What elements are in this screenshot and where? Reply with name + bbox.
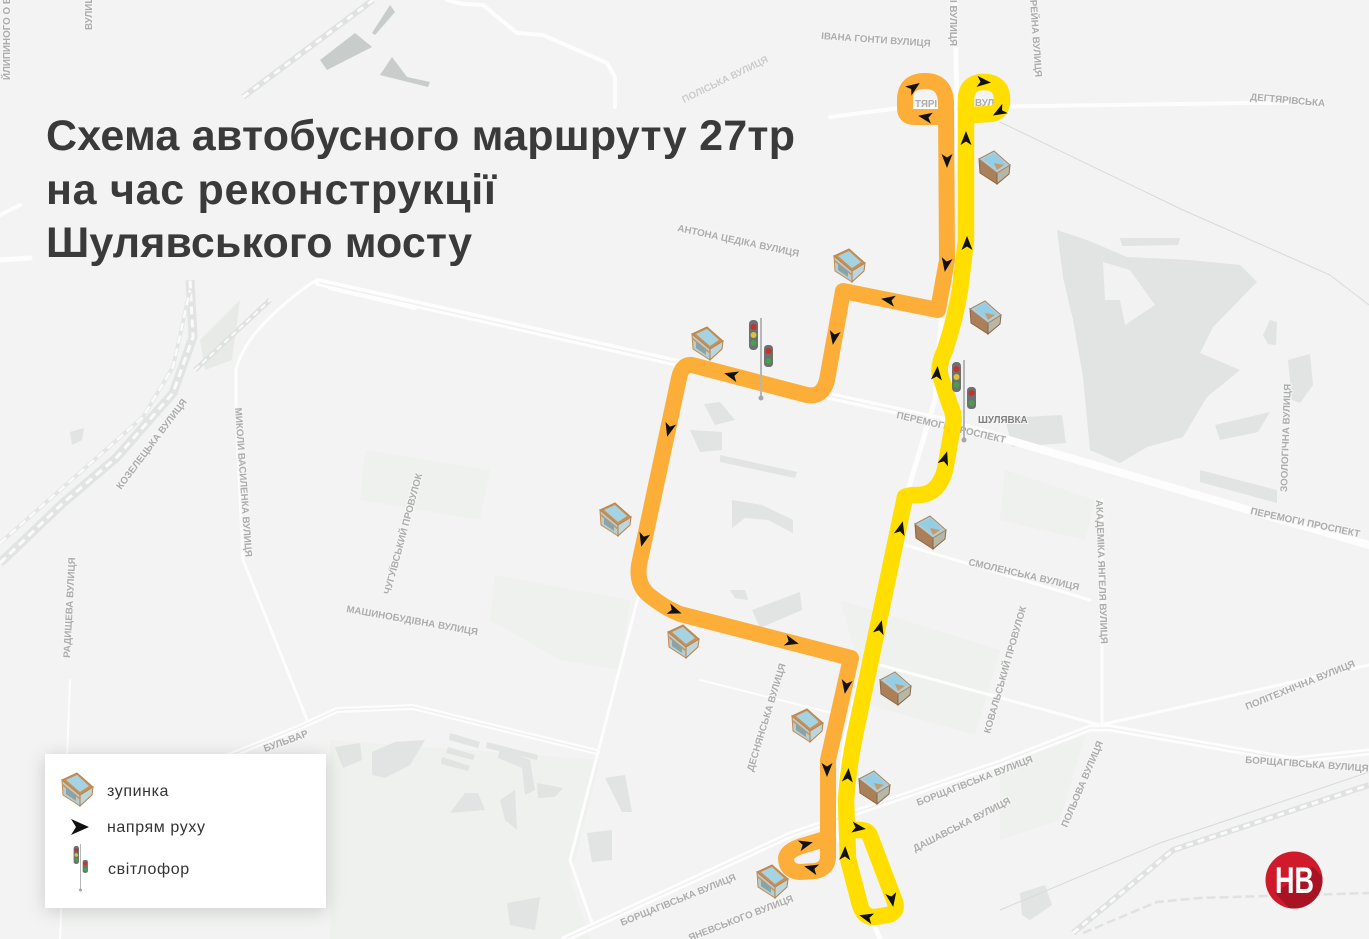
traffic light: east bbox=[952, 360, 976, 442]
title: Схема автобусного маршруту 27тр bbox=[46, 112, 795, 160]
street labels: І ВУЛИЦЯ bbox=[947, 0, 958, 46]
title: Шулявського мосту bbox=[46, 219, 472, 267]
logo: NV: НВ bbox=[1275, 860, 1314, 901]
street labels: ДАШАВСЬКА ВУЛИЦЯ bbox=[911, 796, 1013, 855]
legend text: stop: зупинка bbox=[107, 783, 169, 800]
street labels: ВУЛИ bbox=[975, 98, 1001, 109]
street labels: ДЕСНЯНСЬКА ВУЛИЦЯ bbox=[745, 662, 789, 773]
street labels: АНТОНА ЦЕДІКА ВУЛИЦЯ bbox=[676, 223, 800, 260]
direction arrows: orange route bbox=[636, 78, 953, 875]
traffic light: west bbox=[749, 318, 773, 400]
street labels: КОВАЛЬСЬКИЙ ПРОВУЛОК bbox=[981, 605, 1029, 735]
street labels: ЧУГУЇВСЬКИЙ ПРОВУЛОК bbox=[381, 472, 425, 596]
legend icon: direction arrow bbox=[71, 819, 89, 835]
route: yellow line bbox=[846, 82, 1002, 917]
street labels: РАДИЩЕВА ВУЛИЦЯ bbox=[62, 557, 78, 658]
street labels: ПОЛІСЬКА ВУЛИЦЯ bbox=[680, 54, 770, 106]
legend text: direction: напрям руху bbox=[107, 819, 206, 836]
street labels: ЗООЛОГІЧНА ВУЛИЦЯ bbox=[1279, 384, 1294, 492]
street labels: МИКОЛИ ВАСИЛЕНКА ВУЛИЦЯ bbox=[232, 407, 253, 557]
street labels: БУЛЬВАР bbox=[262, 728, 310, 755]
street labels: ПЕРЕМОГИ ПРОСПЕКТ bbox=[895, 410, 1007, 446]
title: на час реконструкції bbox=[46, 166, 497, 214]
legend icon: traffic light bbox=[74, 844, 88, 892]
legend icon: bus stop bbox=[62, 773, 93, 806]
legend text: traffic light: світлофор bbox=[108, 861, 190, 878]
direction arrows: yellow route bbox=[839, 76, 1008, 924]
street labels: КОЗЕЛЕЦЬКА ВУЛИЦЯ bbox=[115, 397, 190, 492]
street labels: ПОЛІТЕХНІЧНА ВУЛИЦЯ bbox=[1244, 659, 1357, 713]
street labels: БОРЩАГІВСЬКА ВУЛИЦЯ bbox=[915, 754, 1035, 809]
street labels: ТЯРІ bbox=[915, 99, 937, 110]
title bbox=[46, 112, 795, 267]
street labels: АКАДЕМІКА ЯНГЕЛЯ ВУЛИЦЯ bbox=[1093, 500, 1109, 644]
logo: NV bbox=[1266, 852, 1322, 908]
street labels: БОРЩАГІВСЬКА ВУЛИЦЯ bbox=[1245, 755, 1369, 775]
street labels: СМОЛЕНСЬКА ВУЛИЦЯ bbox=[967, 557, 1080, 593]
street labels: МАШИНОБУДІВНА ВУЛИЦЯ bbox=[345, 604, 479, 638]
legend panel bbox=[45, 754, 326, 908]
street labels: БОРЩАГІВСЬКА ВУЛИЦЯ bbox=[619, 872, 738, 929]
street labels: РЕЙНА ВУЛИЦЯ bbox=[1027, 0, 1044, 78]
route: orange line bbox=[638, 81, 947, 872]
street labels: ПОЛЬОВА ВУЛИЦЯ bbox=[1060, 739, 1106, 829]
subtle land areas bbox=[330, 450, 1095, 939]
street labels: ІВАНА ГОНТИ ВУЛИЦЯ bbox=[821, 31, 931, 50]
street labels: ДЕГТЯРІВСЬКА bbox=[1250, 92, 1326, 110]
street labels: ШУЛЯВКА bbox=[978, 415, 1028, 426]
bus stop icons on map bbox=[600, 151, 1010, 898]
street labels: ПЕРЕМОГИ ПРОСПЕКТ bbox=[1249, 506, 1361, 540]
